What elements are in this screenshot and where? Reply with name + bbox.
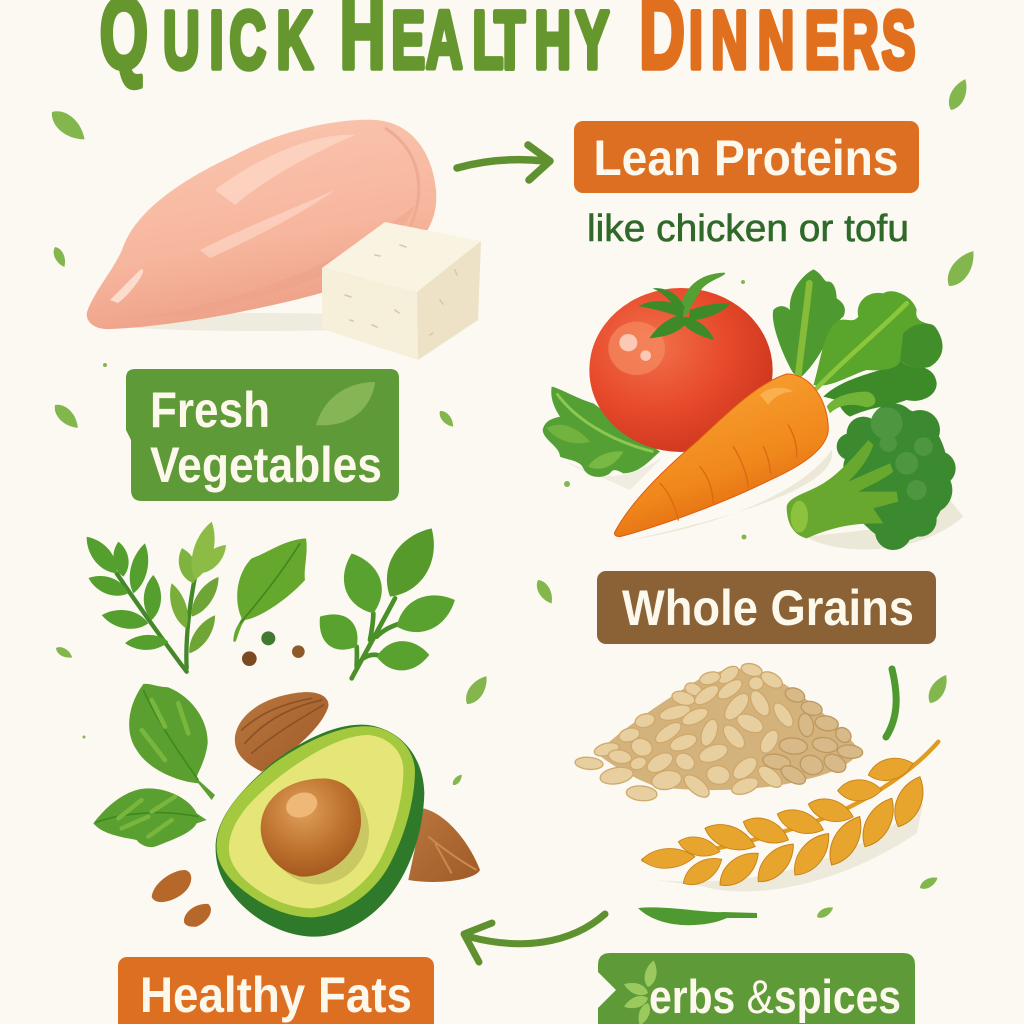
icon: leaf on label xyxy=(316,382,375,425)
icon: broccoli xyxy=(787,403,956,550)
icon: avocado pit xyxy=(261,778,361,877)
label: herbs and spices: erbs &spices xyxy=(649,970,901,1023)
scattered leaves xyxy=(46,76,981,925)
icon: basil leaf upper xyxy=(129,684,215,800)
arrow: chicken to lean proteins xyxy=(457,145,550,180)
label: lean proteins: Lean Proteins xyxy=(594,130,898,186)
icon: basil leaf lower xyxy=(93,788,207,847)
icon: herbs group xyxy=(80,519,462,678)
icon: almond top xyxy=(235,692,328,772)
icon: tomato stem xyxy=(638,273,731,340)
icon: leaf cluster on label xyxy=(622,959,659,1024)
icon: avocado half xyxy=(216,725,424,937)
icon: grain pile xyxy=(575,661,863,802)
icon: tofu cube xyxy=(322,222,481,360)
label: healthy fats: Healthy Fats xyxy=(140,967,412,1023)
arrow: herbs to fats xyxy=(464,914,605,962)
label: fresh vegetables: Vegetables xyxy=(150,437,382,493)
label: whole grains: Whole Grains xyxy=(622,580,914,636)
icon: carrot xyxy=(614,374,828,537)
label: herbs and spices xyxy=(598,953,915,1024)
icon: herb sprig left xyxy=(80,519,231,672)
label: fresh vegetables xyxy=(126,369,399,501)
text: like chicken or tofu: like chicken or tofu xyxy=(587,208,909,250)
label: fresh vegetables: Fresh xyxy=(150,382,270,438)
icon: small almonds xyxy=(152,870,211,927)
icon: avocado and almonds group xyxy=(93,684,480,937)
icon: herb sprig right xyxy=(310,519,462,678)
icon: kale xyxy=(813,291,943,417)
icon: back leaf xyxy=(773,269,845,377)
icon: peppercorns xyxy=(242,631,305,666)
icon: basil leaf center xyxy=(233,538,307,642)
icon: wheat stalk xyxy=(641,742,938,893)
icon: chicken breast xyxy=(87,120,436,331)
icon: vegetables group xyxy=(543,269,963,550)
icon: tomato xyxy=(589,273,773,452)
label: whole grains xyxy=(597,571,936,644)
icon: left greens xyxy=(543,387,660,477)
title xyxy=(100,0,916,90)
icon: almond right xyxy=(408,808,480,882)
